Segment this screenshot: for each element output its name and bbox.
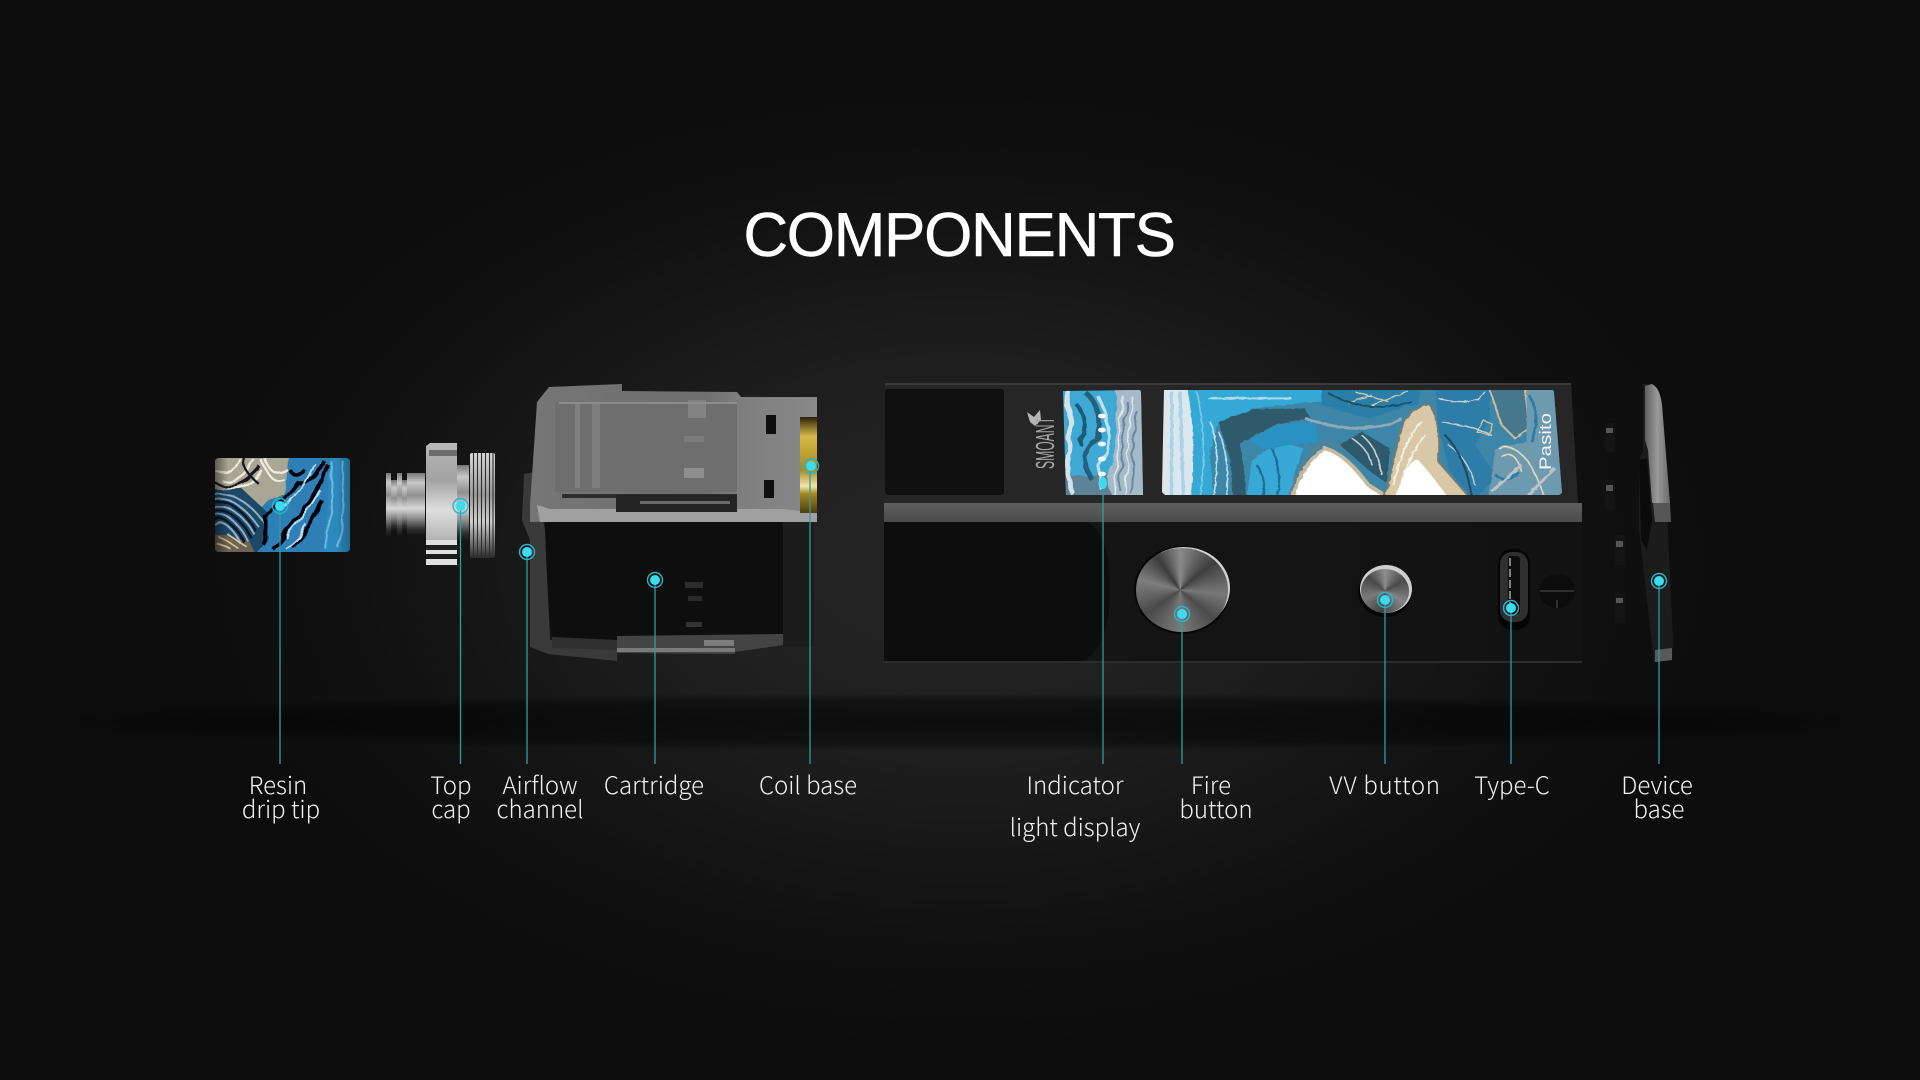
side clips — [1605, 423, 1625, 622]
callout: airflow channel: Airflow — [502, 766, 578, 801]
callout: fire button — [1174, 606, 1253, 825]
callout: device base: Device — [1621, 766, 1693, 801]
callout: Type-C — [1474, 600, 1550, 801]
cartridge part — [522, 384, 817, 661]
callout: cartridge — [604, 572, 704, 801]
device body — [884, 383, 1582, 663]
resin drip tip part — [212, 455, 352, 553]
air hole — [1539, 574, 1575, 608]
callout: indicator light display: Indicator — [1027, 766, 1124, 801]
callout: fire button: button — [1179, 790, 1253, 825]
callout: VV button — [1329, 592, 1441, 801]
callout: indicator light display: light display — [1010, 808, 1141, 843]
callout: device base: base — [1634, 790, 1684, 825]
callout: Type-C: Type-C — [1474, 766, 1550, 801]
camera recess — [885, 389, 1004, 495]
callout: device base — [1621, 574, 1693, 825]
callout: coil base: Coil base — [759, 766, 857, 801]
logo: SMOANT — [1030, 417, 1060, 469]
top cap part — [386, 443, 495, 565]
resin panel: Pasito — [1536, 413, 1555, 470]
indicator light panel — [1063, 390, 1143, 495]
callout: airflow channel: channel — [497, 790, 583, 825]
device base part — [1639, 384, 1673, 662]
logo — [1027, 410, 1060, 469]
callout: resin drip tip — [242, 498, 320, 825]
title: COMPONENTS — [743, 201, 1175, 270]
callout: resin drip tip: drip tip — [242, 790, 320, 825]
callout: top cap: Top — [430, 766, 472, 801]
callout: VV button: VV button — [1329, 766, 1441, 801]
callout: cartridge: Cartridge — [604, 766, 704, 801]
callout: top cap — [430, 498, 472, 825]
callout: fire button: Fire — [1191, 766, 1231, 801]
VV button — [1358, 565, 1412, 617]
Type-C port — [1498, 549, 1530, 630]
callout: top cap: cap — [431, 790, 471, 825]
callout: airflow channel — [497, 544, 583, 825]
fire button — [1134, 546, 1230, 634]
callout: indicator light display — [1010, 477, 1141, 843]
callout: coil base — [759, 458, 857, 801]
callout: resin drip tip: Resin — [249, 766, 307, 801]
resin panel — [1162, 390, 1562, 495]
